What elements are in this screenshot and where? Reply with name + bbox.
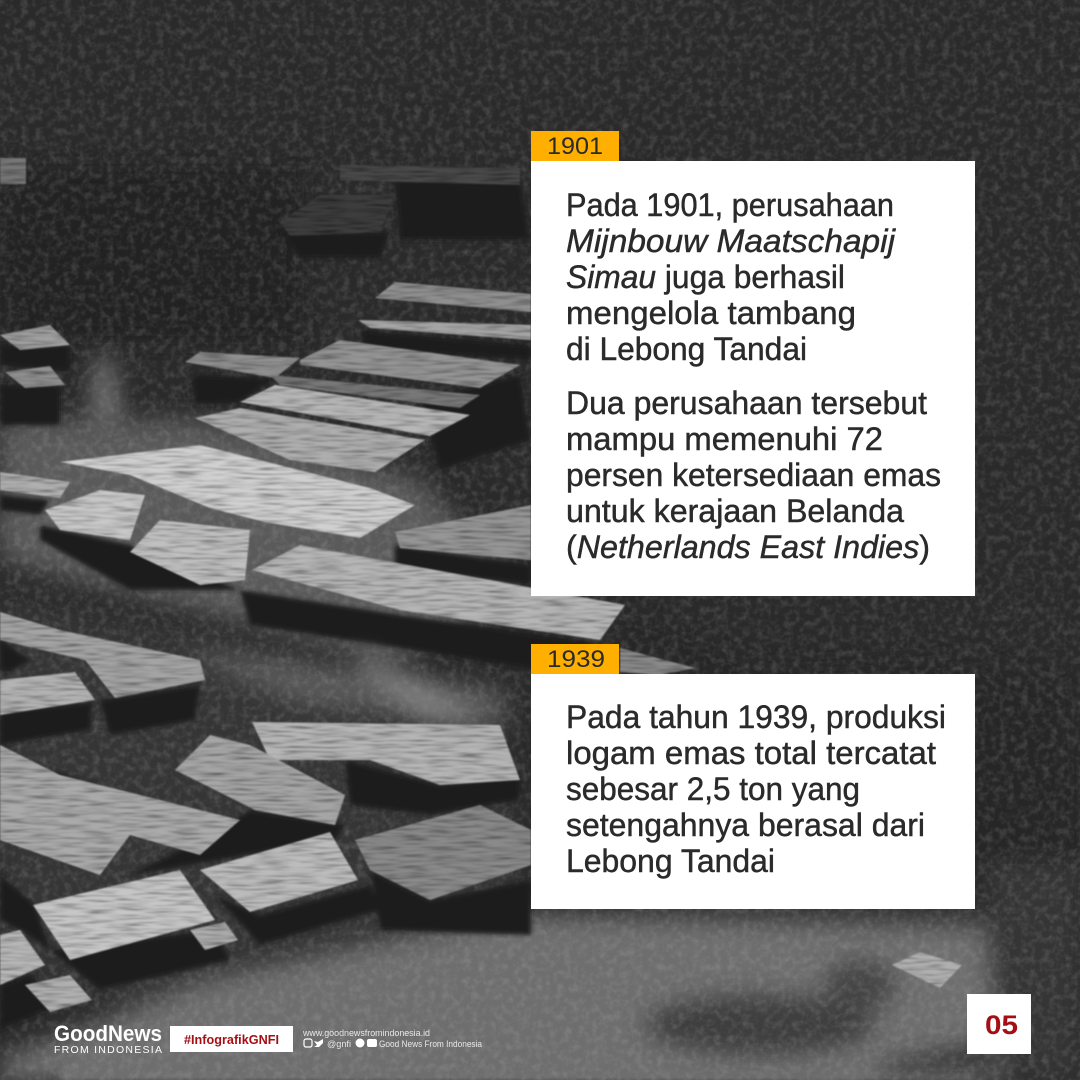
year tag: 1939: 1939 <box>547 646 605 673</box>
rocky foreground reaching the frame edge <box>60 945 975 1080</box>
year tag: 1901 <box>531 131 619 161</box>
text block: 1901 first paragraph: di Lebong Tandai <box>566 331 807 367</box>
website and social handles <box>302 1028 482 1049</box>
text block: 1939 paragraph <box>566 699 946 879</box>
page number: 05 <box>985 1010 1018 1040</box>
panel: 1939 text card <box>531 674 975 909</box>
text block: 1901 first paragraph: Pada 1901, perusahaan <box>566 187 894 223</box>
panel: 1901 text card <box>531 161 975 596</box>
icon: youtube <box>367 1039 377 1047</box>
page number <box>967 994 1031 1054</box>
logo: GoodNews From Indonesia: FROM INDONESIA <box>54 1044 162 1056</box>
lower-left roofs <box>0 612 205 698</box>
text block: 1901 second paragraph: persen ketersediaan emas <box>566 457 941 493</box>
text block: 1901 first paragraph: Mijnbouw Maatschapij <box>566 223 896 259</box>
text block: 1901 second paragraph: (Netherlands East Indies) <box>566 529 930 565</box>
hashtag badge: #InfografikGNFI <box>184 1032 279 1047</box>
central bright roofs <box>60 445 415 538</box>
website and social handles: Good News From Indonesia <box>379 1039 482 1049</box>
text block: 1939 paragraph: setengahnya berasal dari <box>566 807 925 843</box>
text block: 1901 second paragraph: untuk kerajaan Belanda <box>566 493 904 529</box>
text block: 1901 second paragraph <box>566 385 941 565</box>
hashtag badge <box>170 1026 293 1052</box>
upper buildings <box>280 195 395 236</box>
year tag: 1901: 1901 <box>547 133 603 160</box>
text block: 1939 paragraph: Pada tahun 1939, produksi <box>566 699 946 735</box>
icon: facebook <box>356 1038 364 1048</box>
website and social handles: www.goodnewsfromindonesia.id <box>302 1028 430 1038</box>
text block: 1901 first paragraph: mengelola tambang <box>566 295 856 331</box>
icon: twitter <box>314 1039 323 1047</box>
logo: GoodNews From Indonesia <box>54 1021 162 1056</box>
icon: instagram <box>304 1039 312 1047</box>
year tag: 1939 <box>531 644 619 674</box>
text block: 1901 first paragraph <box>566 187 896 367</box>
text block: 1901 first paragraph: Simau juga berhasil <box>566 259 845 295</box>
text block: 1901 second paragraph: mampu memenuhi 72 <box>566 421 883 457</box>
text block: 1939 paragraph: sebesar 2,5 ton yang <box>566 771 860 807</box>
website and social handles: @gnfi <box>327 1039 351 1049</box>
logo: GoodNews From Indonesia: GoodNews <box>54 1021 162 1046</box>
steam plumes <box>92 355 490 730</box>
text block: 1901 second paragraph: Dua perusahaan tersebut <box>566 385 927 421</box>
text block: 1939 paragraph: Lebong Tandai <box>566 843 775 879</box>
dark building shadows <box>0 180 590 1030</box>
text block: 1939 paragraph: logam emas total tercatat <box>566 735 936 771</box>
